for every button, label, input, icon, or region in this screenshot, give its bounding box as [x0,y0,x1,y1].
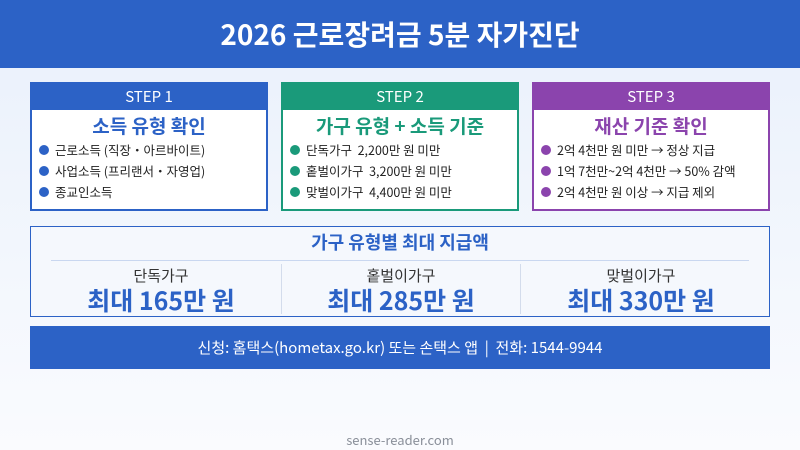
apply bar [30,326,770,369]
panel: max amounts [30,226,770,317]
panel: step 1: STEP 1 [125,86,173,107]
panel: step 2: 맞벌이가구 4,400만 원 미만 [306,182,452,201]
amount: dual-earner [567,265,715,318]
panel: step 3: STEP 3 [627,86,675,107]
footer: sense-reader.com [346,430,454,449]
apply bar: 신청: 홈택스(hometax.go.kr) 또는 손택스 앱 | 전화: 1544-9944 [198,337,602,358]
amount: single-earner: 최대 285만 원 [327,282,475,318]
amount: single-earner [281,264,521,314]
panel: step 3: 2억 4천만 원 미만 → 정상 지급 [557,140,715,159]
panel: max amounts: 가구 유형별 최대 지급액 [311,229,489,255]
panel: step 2: 가구 유형 + 소득 기준 [316,112,484,139]
panel: step 2 [281,82,519,211]
panel: step 3: 재산 기준 확인 [594,112,708,139]
panel: step 3 [532,82,770,211]
title: 2026 근로장려금 5분 자가진단 [220,14,580,54]
amount: dual-earner: 맞벌이가구 [606,265,676,286]
panel: step 3: 1억 7천만~2억 4천만 → 50% 감액 [557,161,736,180]
panel: step 1: 근로소득 (직장・아르바이트) [55,140,205,159]
panel: step 1: 종교인소득 [55,182,113,201]
panel: step 1: 사업소득 (프리랜서・자영업) [55,161,205,180]
panel: step 3: 2억 4천만 원 이상 → 지급 제외 [557,182,715,201]
amount: dual-earner: 최대 330만 원 [567,282,715,318]
panel: step 2: 단독가구 2,200만 원 미만 [306,140,440,159]
title [0,0,800,68]
amount: single [87,265,235,318]
amount: single: 최대 165만 원 [87,282,235,318]
panel: step 1 [30,82,268,211]
panel: step 1: 소득 유형 확인 [92,112,206,139]
panel: step 2: STEP 2 [376,86,424,107]
amount: single-earner: 홑벌이가구 [366,265,436,286]
panel: step 2: 홑벌이가구 3,200만 원 미만 [306,161,452,180]
amount: single: 단독가구 [133,265,189,286]
